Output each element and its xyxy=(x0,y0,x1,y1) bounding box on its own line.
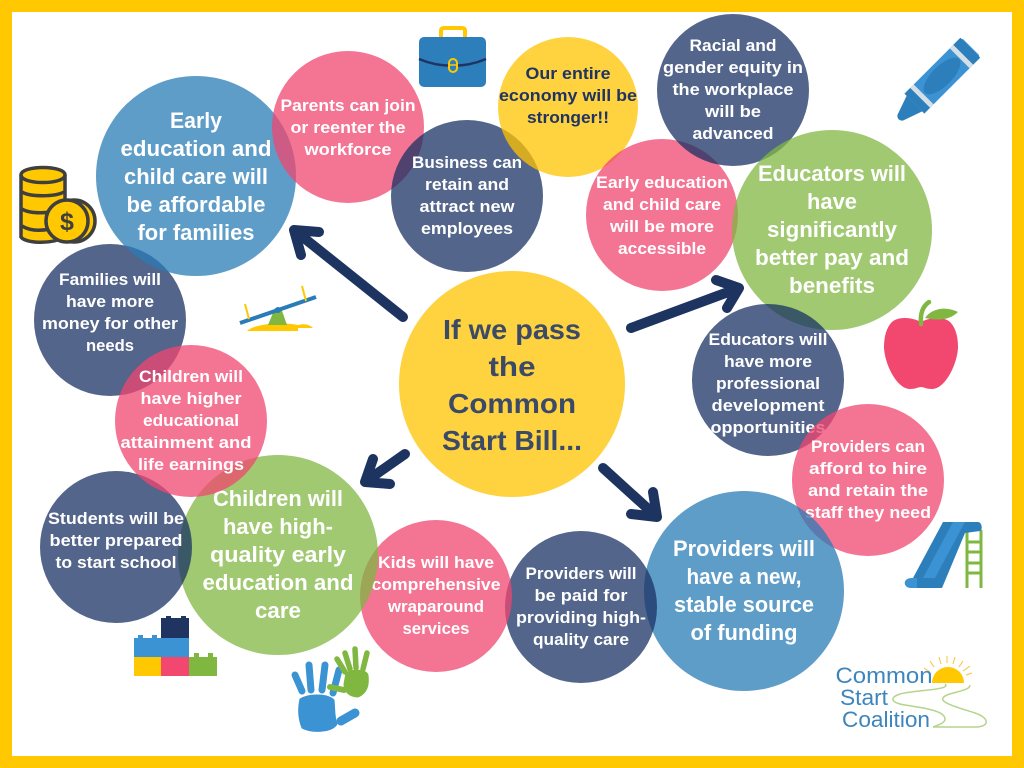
circle: children higher attainment: have higher xyxy=(140,389,242,408)
circle: affordable for families: education and xyxy=(120,136,272,161)
circle: economy stronger: Our entire xyxy=(526,64,610,83)
circle: business retain employees: retain and xyxy=(425,175,509,194)
icon: coin stack: $ xyxy=(60,208,74,236)
circle: more accessible: and child care xyxy=(603,195,721,214)
central circle: if we pass the Common Start Bill: Common xyxy=(448,388,576,419)
circle: children high-quality care: education and xyxy=(202,570,354,595)
circle: providers stable funding: Providers will xyxy=(673,536,815,561)
circle: more accessible: will be more xyxy=(609,217,714,236)
circle: business retain employees: attract new xyxy=(420,197,515,216)
circle: providers paid: providing high- xyxy=(516,608,646,627)
circle: providers paid: be paid for xyxy=(534,586,628,605)
circle: affordable for families: for families xyxy=(138,220,254,245)
logo: Common Start Coalition: Coalition xyxy=(842,707,930,732)
circle: racial gender equity: advanced xyxy=(692,124,774,143)
icon: building blocks xyxy=(134,616,217,676)
logo: Common Start Coalition: Start xyxy=(840,685,888,710)
circle: affordable for families xyxy=(96,76,296,276)
circle: children higher attainment xyxy=(115,345,267,497)
icon: apple xyxy=(884,302,958,389)
circle: providers stable funding: have a new, xyxy=(686,564,802,589)
circle: providers paid: quality care xyxy=(533,630,629,649)
circle: economy stronger: stronger!! xyxy=(527,108,609,127)
circle: educators professional development xyxy=(692,304,844,456)
circle: kids wraparound services: comprehensive xyxy=(372,575,500,594)
icon: crayon xyxy=(889,37,981,129)
circle: more accessible: accessible xyxy=(618,239,706,258)
circle: children high-quality care: have high- xyxy=(223,514,333,539)
circle: children higher attainment: educational xyxy=(143,411,239,430)
circle: parents reenter workforce: Parents can join xyxy=(280,96,416,115)
central circle: if we pass the Common Start Bill: the xyxy=(488,351,536,382)
arrow: to providers xyxy=(603,468,657,517)
circle: racial gender equity: the workplace xyxy=(672,80,794,99)
circle: providers paid xyxy=(505,531,657,683)
central circle: if we pass the Common Start Bill xyxy=(399,271,625,497)
circle: children higher attainment: life earnings xyxy=(138,455,244,474)
circle: students prepared: to start school xyxy=(56,553,176,572)
circle: business retain employees: employees xyxy=(421,219,513,238)
circle: more accessible: Early education xyxy=(596,173,728,192)
circle: educators professional development: have more xyxy=(724,352,812,371)
circle: educators professional development: professional xyxy=(716,374,820,393)
circle: racial gender equity xyxy=(657,14,809,166)
circle: children high-quality care: care xyxy=(255,598,301,623)
circle: kids wraparound services xyxy=(360,520,512,672)
circle: families more money: needs xyxy=(86,336,134,355)
logo: Common Start Coalition xyxy=(836,656,986,732)
circle: families more money: money for other xyxy=(42,314,178,333)
circle: more accessible xyxy=(586,139,738,291)
circle: parents reenter workforce: or reenter the xyxy=(290,118,406,137)
icon: briefcase xyxy=(419,28,486,87)
circle: providers hire retain: Providers can xyxy=(811,437,925,456)
circle: educators better pay: significantly xyxy=(767,217,898,242)
circle: parents reenter workforce xyxy=(272,51,424,203)
circle: providers hire retain: staff they need xyxy=(805,503,931,522)
circle: children high-quality care xyxy=(178,455,378,655)
circle: affordable for families: be affordable xyxy=(126,192,266,217)
circle: students prepared: better prepared xyxy=(50,531,182,550)
circle: kids wraparound services: services xyxy=(402,619,470,638)
circle: children higher attainment: Children will xyxy=(139,367,243,386)
circle: providers paid: Providers will xyxy=(526,564,636,583)
circle: families more money: Families will xyxy=(59,270,161,289)
circle: educators better pay: benefits xyxy=(789,273,875,298)
circle: kids wraparound services: Kids will have xyxy=(378,553,494,572)
arrow: to educators xyxy=(631,280,739,328)
circle: educators professional development: Educators will xyxy=(708,330,828,349)
circle: providers hire retain xyxy=(792,404,944,556)
circle: providers hire retain: afford to hire xyxy=(809,459,927,478)
circle: students prepared xyxy=(40,471,192,623)
circle: families more money: have more xyxy=(66,292,154,311)
circle: providers hire retain: and retain the xyxy=(808,481,928,500)
circle: educators better pay: better pay and xyxy=(755,245,909,270)
icon: coin stack xyxy=(21,168,95,242)
circle: children high-quality care: Children will xyxy=(213,486,343,511)
circle: racial gender equity: Racial and xyxy=(690,36,776,55)
arrow: to affordable xyxy=(294,230,403,317)
circle: racial gender equity: gender equity in xyxy=(663,58,803,77)
logo: Common Start Coalition: Common xyxy=(836,663,932,688)
circle: students prepared: Students will be xyxy=(48,509,184,528)
icon: slide xyxy=(905,522,982,588)
circle: racial gender equity: will be xyxy=(704,102,761,121)
circle: business retain employees xyxy=(391,120,543,272)
circle: educators better pay: Educators will xyxy=(758,161,906,186)
circle: economy stronger: economy will be xyxy=(499,86,637,105)
circle: families more money xyxy=(34,244,186,396)
circle: parents reenter workforce: workforce xyxy=(303,140,392,159)
central circle: if we pass the Common Start Bill: If we pass xyxy=(443,314,581,345)
central circle: if we pass the Common Start Bill: Start Bill... xyxy=(442,425,582,456)
circle: educators professional development: development xyxy=(712,396,825,415)
circle: affordable for families: Early xyxy=(170,108,223,133)
circle: children high-quality care: quality early xyxy=(210,542,347,567)
arrow: to children xyxy=(365,454,405,484)
circle: affordable for families: child care will xyxy=(124,164,268,189)
circle: providers stable funding xyxy=(644,491,844,691)
circle: educators better pay xyxy=(732,130,932,330)
circle: economy stronger xyxy=(498,37,638,177)
circle: children higher attainment: attainment and xyxy=(120,433,252,452)
circle: business retain employees: Business can xyxy=(412,153,522,172)
circle: educators better pay: have xyxy=(807,189,857,214)
circle: providers stable funding: stable source xyxy=(674,592,814,617)
circle: providers stable funding: of funding xyxy=(690,620,798,645)
icon: seesaw xyxy=(240,286,316,331)
icon: handprints xyxy=(295,649,368,731)
circle: kids wraparound services: wraparound xyxy=(387,597,484,616)
circle: educators professional development: opportunities xyxy=(710,418,826,437)
